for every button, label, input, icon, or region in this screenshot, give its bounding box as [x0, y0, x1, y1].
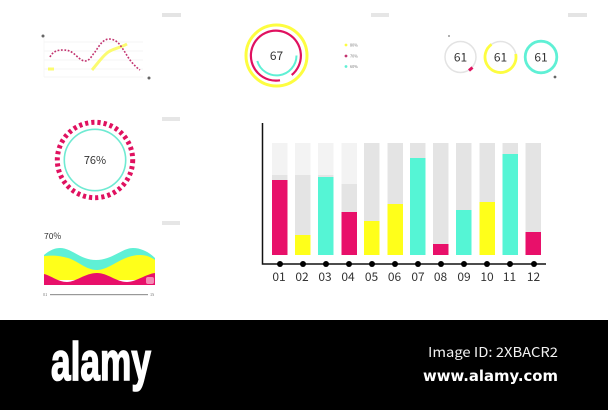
axis labels: 09: [457, 268, 471, 285]
panel: footer band: [0, 320, 608, 410]
yellow line: [48, 44, 127, 70]
placeholder label: small gauges: [568, 13, 587, 17]
axis labels: 01: [272, 268, 286, 285]
watermark fragment: [146, 277, 154, 284]
legend: 70%: [350, 54, 358, 59]
icon: line chart end dot: [148, 76, 150, 80]
gauge value: 76%: [84, 152, 106, 168]
gauge 2: 61: [494, 48, 507, 66]
panel: bar chart: [262, 123, 546, 285]
area chart scale: 15: [150, 293, 154, 298]
icon: corner dot bottom: [554, 76, 556, 78]
axis labels: 02: [295, 268, 309, 285]
teal area: [44, 248, 155, 270]
teal arc: [257, 56, 296, 75]
axis labels: 12: [527, 268, 540, 285]
axis labels: 03: [318, 268, 332, 285]
lighter track tops: [272, 143, 357, 184]
image id: Image ID: 2XBACR2: [428, 341, 558, 361]
legend: 60%: [350, 65, 358, 70]
placeholder label: line chart: [162, 13, 181, 17]
yellow outer ring: [246, 25, 307, 86]
placeholder label: area chart: [162, 221, 180, 225]
gauge 1: 61: [454, 48, 467, 66]
bar tracks: [272, 143, 541, 255]
axis labels: 07: [411, 268, 425, 285]
axis labels: 05: [365, 268, 378, 285]
placeholder label: ring gauge: [371, 13, 389, 17]
panel: line chart: [42, 34, 150, 80]
panel: segmented gauge 76%: [57, 122, 133, 198]
area chart scale: [43, 293, 154, 298]
bar values: [272, 154, 541, 255]
icon: line chart start dot: [42, 34, 44, 38]
icon: corner dot top: [448, 35, 450, 37]
yellow area: [44, 255, 155, 280]
axis labels: 10: [480, 268, 494, 285]
axis labels: [272, 268, 540, 285]
gauge 3: 61: [534, 48, 548, 66]
website url: www.alamy.com: [423, 367, 558, 385]
legend: 80%: [350, 43, 358, 48]
axis dots: [277, 261, 537, 267]
legend: [345, 43, 358, 70]
axes: [262, 123, 546, 264]
area chart scale: 01: [43, 293, 47, 298]
panel: ring gauge 67: [246, 25, 307, 86]
axis labels: 08: [434, 268, 447, 285]
placeholder label: segmented gauge: [162, 117, 180, 121]
gauge value: 67: [270, 47, 283, 64]
axis labels: 11: [503, 268, 516, 285]
axis labels: 06: [388, 268, 401, 285]
pink dotted line: [50, 39, 140, 70]
pink arc: [251, 31, 301, 81]
panel: three small gauges: [445, 35, 557, 78]
pink area: [44, 273, 155, 285]
logo: alamy: alamy: [51, 332, 151, 392]
panel: area chart: [43, 230, 155, 298]
axis labels: 04: [341, 268, 355, 285]
area percent label: 70%: [44, 230, 61, 242]
